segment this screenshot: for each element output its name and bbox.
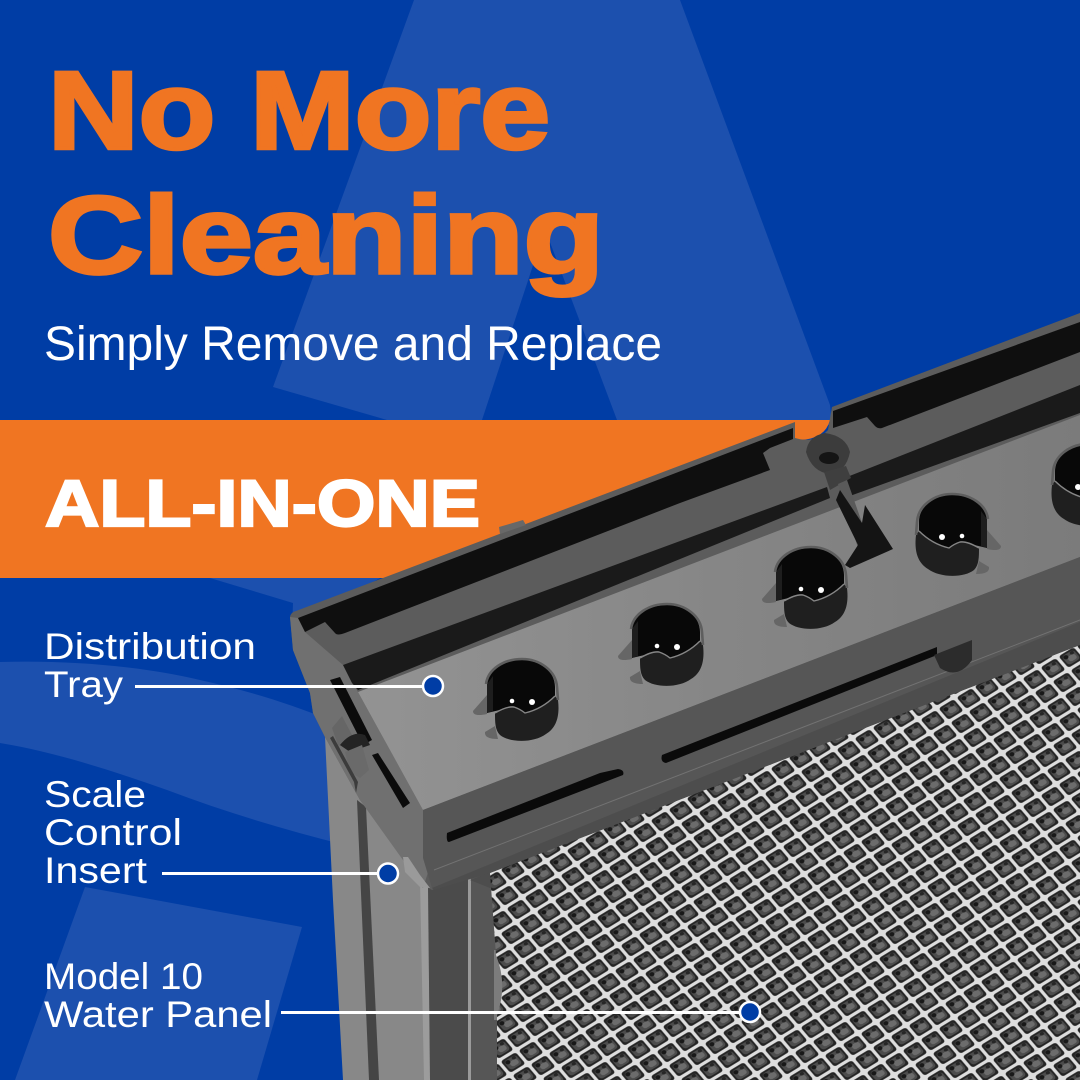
inner channel left — [343, 487, 830, 690]
inner channel right — [847, 385, 1080, 497]
callout: model 10 water panel: Water Panel — [44, 994, 272, 1035]
front slot left — [447, 769, 623, 842]
callout: scale control insert: Scale — [44, 774, 146, 815]
callout: scale control insert — [44, 774, 398, 891]
product: cups — [473, 444, 1080, 741]
corner bracket — [403, 857, 430, 888]
heading — [48, 50, 604, 297]
product: water panel with distribution tray — [290, 313, 1080, 1080]
front clip — [934, 640, 972, 672]
product: vertical frame — [325, 640, 1080, 1080]
rear channel left — [298, 428, 793, 634]
background shapes: lower swoosh and wedge — [0, 578, 380, 1080]
heading: No More — [48, 50, 550, 172]
callout: distribution tray: Distribution — [44, 626, 256, 667]
heading: Cleaning — [48, 174, 604, 297]
tray floor — [358, 415, 1080, 810]
left side slot lower — [372, 753, 410, 808]
product: tray body — [290, 313, 1080, 890]
tray side face — [290, 617, 432, 888]
product: mesh media — [490, 645, 1080, 1080]
callout: distribution tray — [44, 626, 443, 705]
product: center post — [806, 433, 893, 568]
orange band — [0, 420, 830, 578]
tray tab — [499, 520, 526, 534]
callout: distribution tray: Tray — [44, 664, 124, 705]
subtitle: Simply Remove and Replace — [44, 318, 662, 371]
background shape: large letter A — [273, 0, 832, 425]
left side slot upper — [330, 677, 372, 745]
rear channel right — [833, 322, 1080, 428]
callout: scale control insert: Insert — [44, 850, 148, 891]
callout: model 10 water panel — [44, 956, 760, 1035]
side clip — [330, 716, 370, 793]
callout: model 10 water panel: Model 10 — [44, 956, 203, 997]
front wall — [423, 557, 1080, 888]
front slot right — [662, 647, 937, 763]
callout: scale control insert: Control — [44, 812, 182, 853]
band label: ALL-IN-ONE — [45, 466, 480, 540]
